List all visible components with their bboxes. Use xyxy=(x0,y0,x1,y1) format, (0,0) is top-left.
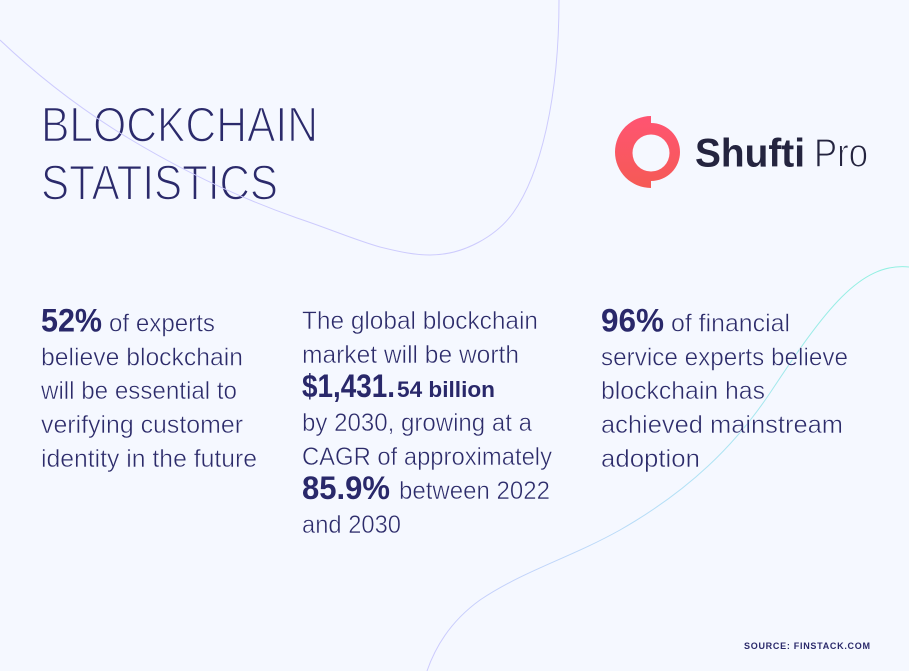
column 2: global blockchain market: market will be worth xyxy=(302,341,519,369)
decorative curve: bottom right xyxy=(427,267,909,671)
column 3: 96% of financial service experts: achieved mainstream xyxy=(601,411,843,439)
column 3: 96% of financial service experts: blockchain has xyxy=(601,377,765,405)
column 2: global blockchain market: 54 billion xyxy=(397,377,495,402)
column 1: 52% of experts: identity in the future xyxy=(41,445,257,473)
column 2: global blockchain market: CAGR of approximately xyxy=(302,443,552,471)
column 1: 52% of experts: verifying customer xyxy=(41,411,243,439)
column 2: global blockchain market: The global blockchain xyxy=(302,307,538,335)
logo wordmark: Shufti xyxy=(695,132,805,176)
column 1: 52% of experts xyxy=(40,302,257,473)
column 3: 96% of financial service experts xyxy=(601,302,848,473)
column 3: 96% of financial service experts: of financial xyxy=(671,310,790,338)
logo wordmark: Pro xyxy=(814,132,868,176)
column 2: global blockchain market xyxy=(302,307,552,539)
column 2: global blockchain market: between 2022 xyxy=(399,477,550,505)
logo wordmark xyxy=(695,132,868,176)
source note: SOURCE: FINSTACK.COM xyxy=(744,641,870,651)
column 1: 52% of experts: 52% xyxy=(41,302,102,338)
column 1: 52% of experts: of experts xyxy=(109,310,215,338)
column 1: 52% of experts: believe blockchain xyxy=(41,344,243,372)
column 2: global blockchain market: 85.9% xyxy=(302,470,390,506)
column 2: global blockchain market: $1,431. xyxy=(302,368,395,404)
title: BLOCKCHAIN xyxy=(41,98,318,152)
column 1: 52% of experts: will be essential to xyxy=(40,377,237,405)
logo: Shufti Pro xyxy=(615,116,868,188)
column 3: 96% of financial service experts: service experts believe xyxy=(601,344,848,372)
column 2: global blockchain market: and 2030 xyxy=(302,511,401,539)
column 3: 96% of financial service experts: 96% xyxy=(601,302,664,338)
column 3: 96% of financial service experts: adoption xyxy=(601,445,700,473)
title xyxy=(41,98,318,210)
decorative curve: top xyxy=(0,0,559,255)
icon: logo ring xyxy=(615,116,680,188)
column 2: global blockchain market: by 2030, growing at a xyxy=(302,409,532,437)
title: STATISTICS xyxy=(41,156,278,210)
